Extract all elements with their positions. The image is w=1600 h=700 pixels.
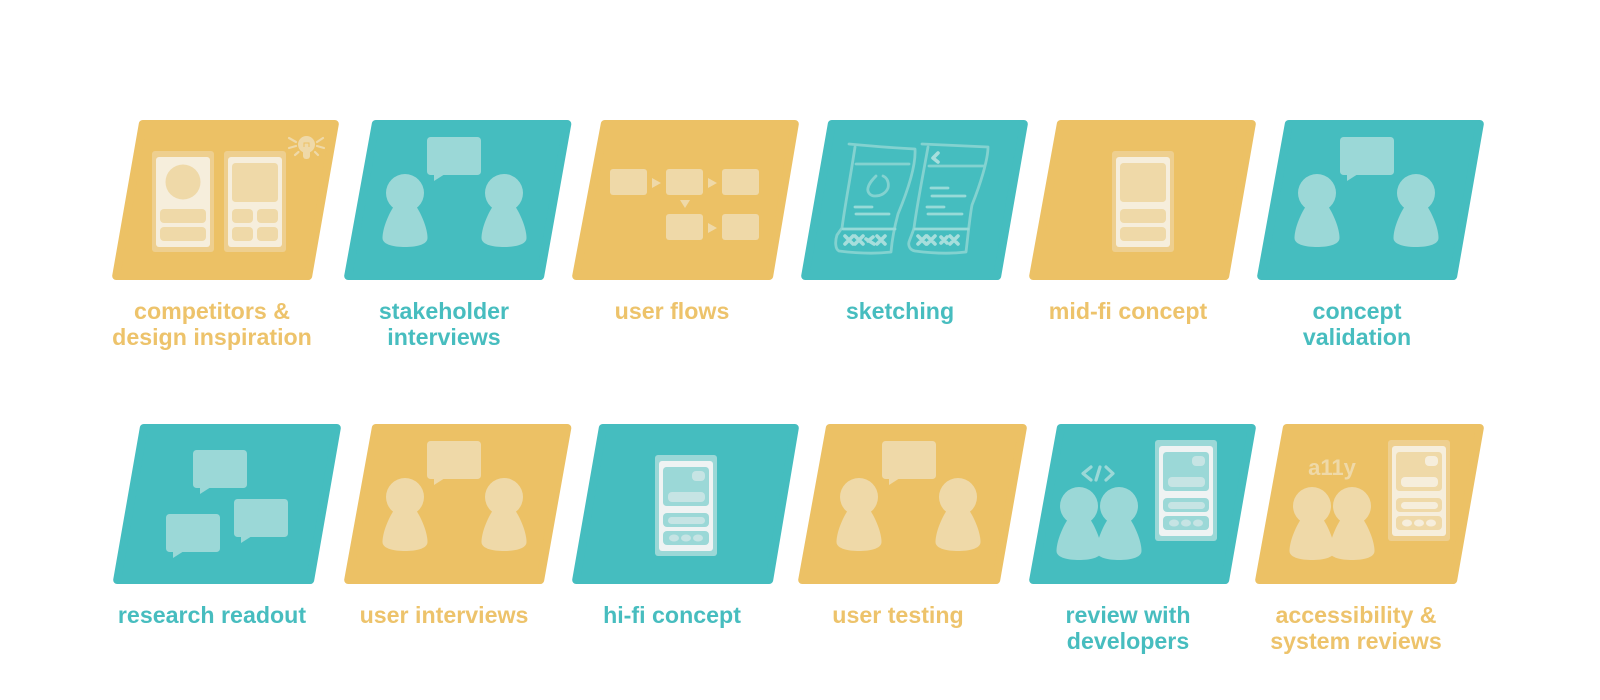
icon: two people talking <box>382 441 526 551</box>
label <box>379 298 509 350</box>
panel background <box>1033 428 1252 580</box>
icon: flow diagram <box>610 169 759 240</box>
icon: two people talking <box>1294 137 1438 247</box>
label: interviews <box>387 324 501 350</box>
icon: two people <box>1290 487 1374 560</box>
label: research readout <box>118 602 306 628</box>
icon: light bulb <box>289 136 324 159</box>
panel background <box>348 428 567 580</box>
icon: hi-fi phone <box>1388 440 1450 541</box>
label: stakeholder <box>379 298 509 324</box>
panel background <box>576 124 795 276</box>
card: user flows <box>576 124 795 324</box>
panel background <box>802 428 1023 580</box>
panel background <box>348 124 567 276</box>
panel background <box>1261 124 1480 276</box>
label: accessibility & <box>1275 602 1437 628</box>
card: sketching <box>805 124 1024 324</box>
label <box>112 298 312 350</box>
icon: two people talking <box>382 137 526 247</box>
card: research readout <box>117 428 337 628</box>
label <box>1270 602 1442 654</box>
card: review with developers <box>1033 428 1252 654</box>
icon: two developers <box>1056 487 1142 560</box>
label: review with <box>1066 602 1190 628</box>
label: user flows <box>615 298 729 324</box>
label: user interviews <box>360 602 528 628</box>
card: user testing <box>802 428 1023 628</box>
label: sketching <box>846 298 954 324</box>
panel background <box>116 124 335 276</box>
label: user testing <box>832 602 964 628</box>
panel background <box>117 428 337 580</box>
icon: code brackets <box>1083 467 1113 480</box>
label <box>1303 298 1411 350</box>
card: accessibility & system reviews <box>1259 428 1480 654</box>
card: mid-fi concept <box>1033 124 1252 324</box>
panel background <box>805 124 1024 276</box>
panel background <box>1259 428 1480 580</box>
icon: three speech bubbles <box>166 450 288 558</box>
icon: grid wireframe phone <box>224 151 286 252</box>
icon: a11y text: a11y <box>1308 455 1357 480</box>
card: competitors & design inspiration <box>112 124 335 350</box>
card: hi-fi concept <box>576 428 795 628</box>
panel background <box>576 428 795 580</box>
icon: hand-drawn wireframes <box>836 144 988 253</box>
label: validation <box>1303 324 1411 350</box>
card: stakeholder interviews <box>348 124 567 350</box>
label: mid-fi concept <box>1049 298 1208 324</box>
card: concept validation <box>1261 124 1480 350</box>
label: competitors & <box>134 298 290 324</box>
label: design inspiration <box>112 324 312 350</box>
label: developers <box>1067 628 1189 654</box>
card: user interviews <box>348 428 567 628</box>
icon: hi-fi phone <box>1155 440 1217 541</box>
label: hi-fi concept <box>603 602 741 628</box>
icon: two people talking <box>836 441 980 551</box>
icon: hi-fi phone <box>655 455 717 556</box>
label: system reviews <box>1270 628 1442 654</box>
label: concept <box>1313 298 1402 324</box>
icon: mid-fi phone <box>1112 151 1174 252</box>
panel background <box>1033 124 1252 276</box>
icon: profile wireframe phone <box>152 151 214 252</box>
label <box>1066 602 1190 654</box>
